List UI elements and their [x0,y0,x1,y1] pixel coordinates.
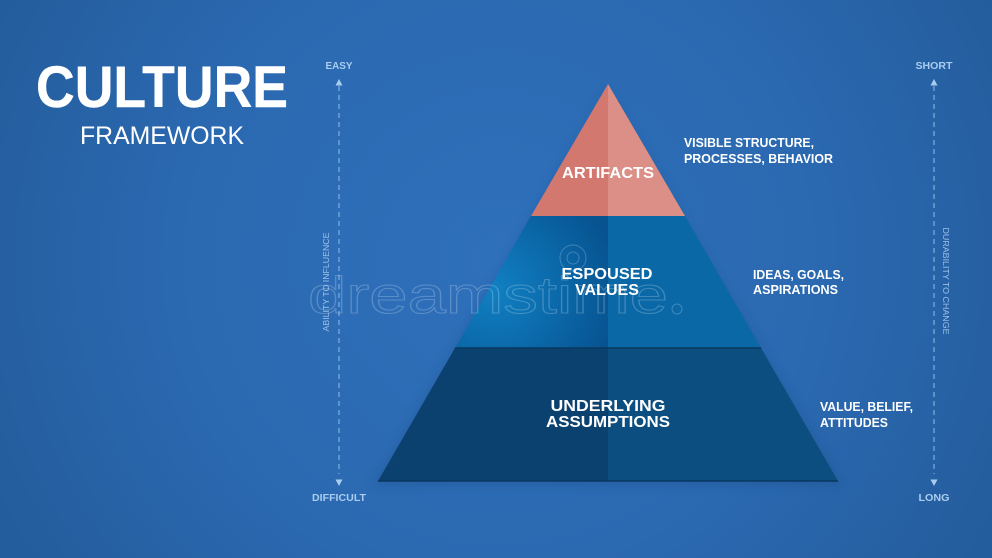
pyramid tier: artifacts: ARTIFACTS [562,165,654,182]
title: CULTURE [36,55,288,120]
left axis: ability to influence [312,60,367,504]
annotation: underlying assumptions: ATTITUDES [820,416,888,430]
annotation: artifacts: VISIBLE STRUCTURE, [684,136,814,150]
annotations beside the tiers [684,136,913,430]
pyramid tier: espoused values [455,216,761,348]
annotation: espoused values: IDEAS, GOALS, [753,268,844,282]
left axis: ability to influence: EASY [326,60,352,72]
pyramid [372,84,844,486]
annotation: espoused values [753,268,844,297]
pyramid tier: espoused values: VALUES [575,282,639,299]
right axis: durability to change: SHORT [916,60,953,72]
annotation: underlying assumptions: VALUE, BELIEF, [820,400,913,414]
left axis: ability to influence: ABILITY TO INFLUENCE [321,232,331,332]
pyramid tier: underlying assumptions: ASSUMPTIONS [546,414,670,431]
annotation: artifacts: PROCESSES, BEHAVIOR [684,152,833,166]
right axis: durability to change [916,60,953,504]
pyramid tier: underlying assumptions: UNDERLYING [550,398,666,415]
annotation: espoused values: ASPIRATIONS [753,283,838,297]
watermark [308,245,682,325]
right axis: durability to change: LONG [918,492,950,504]
right axis: durability to change: DURABILITY TO CHANGE [941,228,951,335]
title [36,55,288,150]
title: FRAMEWORK [80,122,244,150]
left axis: ability to influence: DIFFICULT [312,492,367,504]
annotation: underlying assumptions [820,400,913,430]
pyramid tier: underlying assumptions [378,348,838,481]
annotation: artifacts [684,136,833,166]
watermark: dreamstime [308,267,668,325]
pyramid tier: artifacts [531,84,685,216]
pyramid tier: espoused values: ESPOUSED [562,266,652,283]
